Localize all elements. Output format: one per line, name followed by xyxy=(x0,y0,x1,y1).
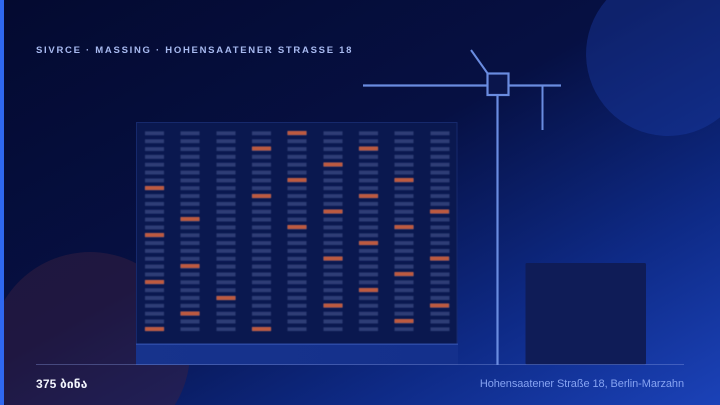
crane brace xyxy=(471,50,488,74)
ground line xyxy=(36,364,684,365)
neighbouring block xyxy=(526,263,646,364)
building podium xyxy=(136,344,458,365)
crane cab xyxy=(488,74,508,95)
crane xyxy=(363,50,561,365)
building body xyxy=(136,122,457,344)
decorative circle bottom left xyxy=(0,252,190,405)
podium top edge xyxy=(136,344,458,345)
address: Hohensaatener Straße 18, Berlin-Marzahn xyxy=(480,378,684,390)
crane mast xyxy=(496,96,499,365)
unit count: 375 ბინა xyxy=(36,377,88,391)
highlighted units xyxy=(145,131,449,331)
decorative circle top right xyxy=(586,0,720,136)
crane jib xyxy=(363,84,561,87)
unit rows xyxy=(154,131,440,331)
title: SIVRCE · MASSING · HOHENSAATENER STRASSE 18 xyxy=(36,44,353,56)
left accent bar xyxy=(0,0,4,405)
building massing xyxy=(136,122,458,365)
crane hook line xyxy=(542,85,544,130)
